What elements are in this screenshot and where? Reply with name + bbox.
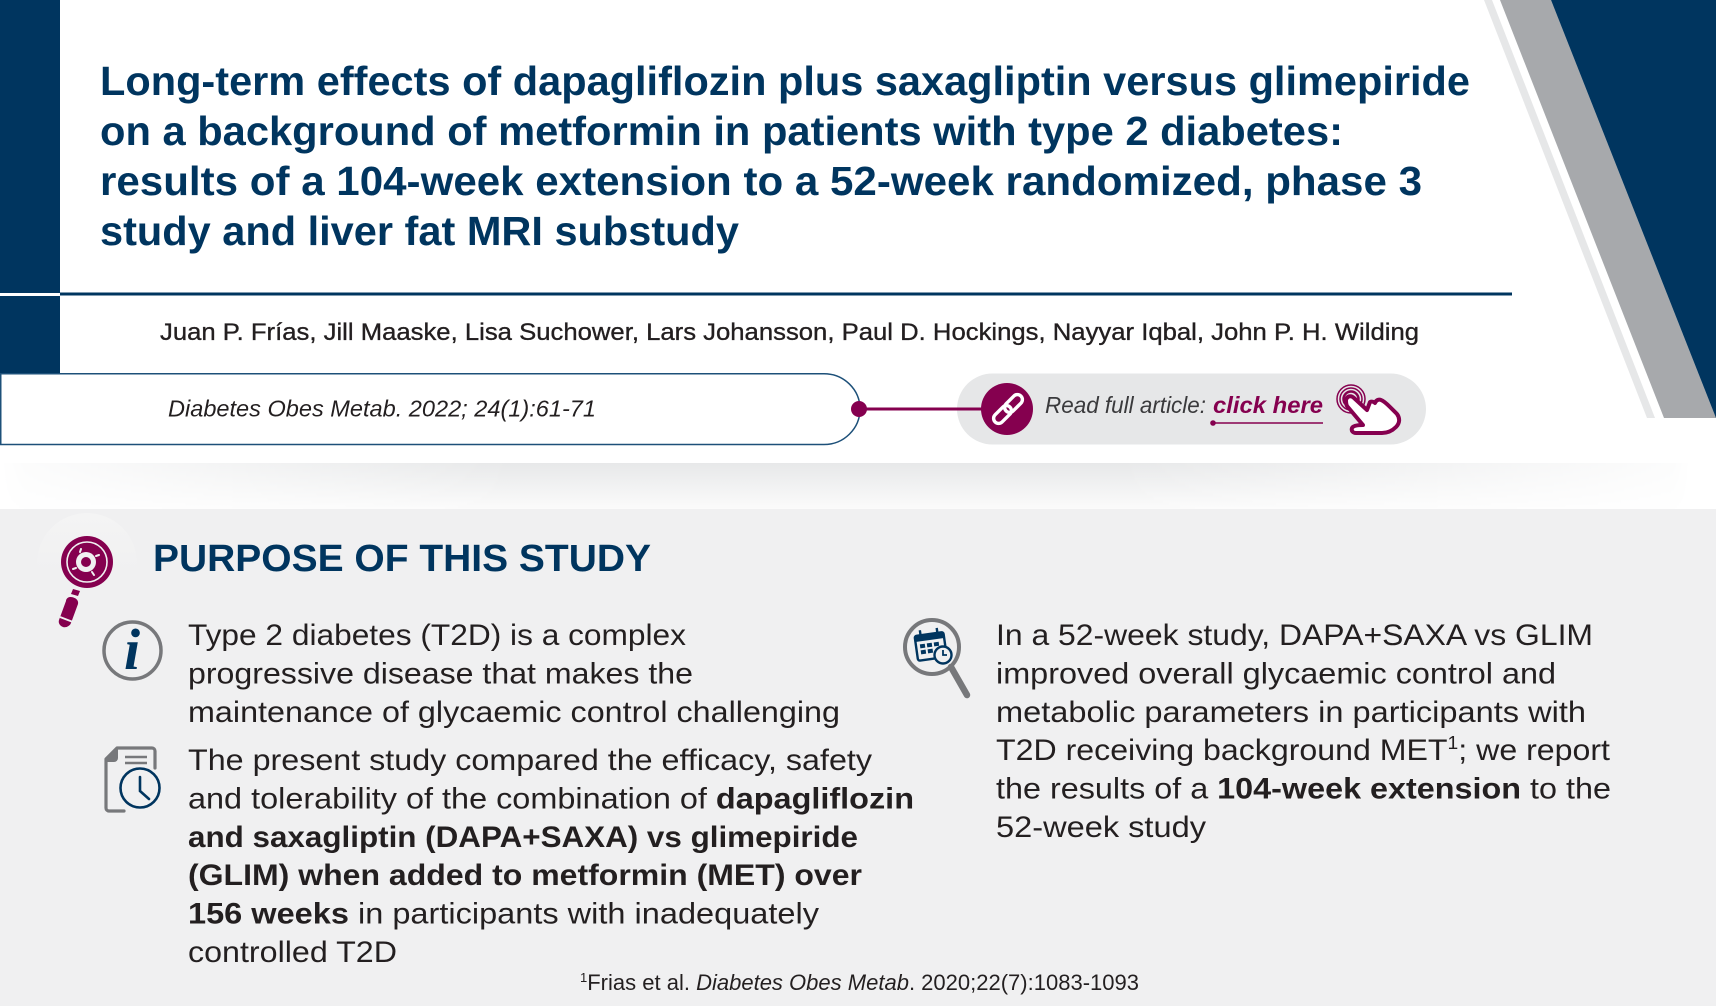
text block: 52-week study: ; we report: [1458, 734, 1611, 767]
title: results of a 104-week extension to a 52-week randomized, phase 3: [100, 158, 1422, 204]
text block: present study: (GLIM) when added to metformin (MET) over: [188, 859, 862, 892]
panel: purpose background: [0, 509, 1716, 1006]
connector line: [851, 401, 985, 417]
icon: information: [104, 617, 161, 682]
icon: information: i: [124, 617, 140, 682]
icon: magnifier with calendar: [905, 620, 967, 695]
text block: T2D background: progressive disease that makes the: [188, 658, 693, 690]
icon: chain link: [981, 383, 1033, 435]
text block: present study: controlled T2D: [188, 936, 397, 969]
text block: 52-week study: In a 52-week study, DAPA+SAXA vs GLIM: [996, 619, 1593, 652]
title: study and liver fat MRI substudy: [100, 208, 739, 254]
link text: click here: [1213, 392, 1323, 418]
left navy bar: [0, 0, 60, 374]
text block: present study: and tolerability of the combination of dapagliflozin: [188, 782, 914, 816]
text block: T2D background: maintenance of glycaemic control challenging: [188, 696, 840, 729]
footnote: 1: [580, 970, 587, 985]
icon: document with clock: [106, 748, 160, 811]
icon: pointing hand: [1337, 385, 1399, 433]
text block: 52-week study: T2D receiving background MET: [996, 734, 1418, 767]
text block: 52-week study: metabolic parameters in participants with: [996, 696, 1586, 729]
text block: present study: 156 weeks in participants with inadequately: [188, 898, 819, 930]
title divider rule: [60, 292, 1512, 296]
title: on a background of metformin in patients with type 2 diabetes:: [100, 108, 1343, 154]
shadow band above purpose panel: [150, 463, 1531, 500]
text block: T2D background: Type 2 diabetes (T2D) is a complex: [188, 619, 686, 652]
citation box: [1, 374, 860, 444]
text block: T2D background: [188, 619, 840, 729]
heading: purpose of this study: PURPOSE OF THIS STUDY: [153, 538, 651, 580]
link text: [1045, 392, 1323, 426]
text block: 52-week study: 52-week study: [996, 811, 1206, 844]
authors: Juan P. Frías, Jill Maaske, Lisa Suchower, Lars Johansson, Paul D. Hockings, Nayyar Iqbal, John P. H. Wilding: [160, 319, 1419, 346]
text block: present study: The present study compared the efficacy, safety: [188, 744, 872, 777]
read full article link pill: [851, 374, 1426, 444]
icon: magnifier with target: [37, 513, 137, 627]
footnote: Frias et al.: [587, 970, 696, 995]
text block: present study: [188, 744, 914, 969]
footnote: Diabetes Obes Metab. 2020;22(7):1083-1093: [696, 970, 1139, 995]
link text: Read full article:: [1045, 392, 1206, 418]
text block: 52-week study: the results of a 104-week extension to the: [996, 772, 1611, 806]
citation box: Diabetes Obes Metab. 2022; 24(1):61-71: [168, 396, 596, 422]
text block: 52-week study: 1: [1448, 733, 1458, 753]
text block: present study: and saxagliptin (DAPA+SAXA) vs glimepiride: [188, 821, 858, 854]
right corner decoration: [1484, 0, 1716, 418]
title: Long-term effects of dapagliflozin plus saxagliptin versus glimepiride: [100, 58, 1470, 104]
title: [100, 58, 1470, 254]
text block: 52-week study: [996, 619, 1611, 844]
text block: 52-week study: improved overall glycaemic control and: [996, 658, 1556, 690]
